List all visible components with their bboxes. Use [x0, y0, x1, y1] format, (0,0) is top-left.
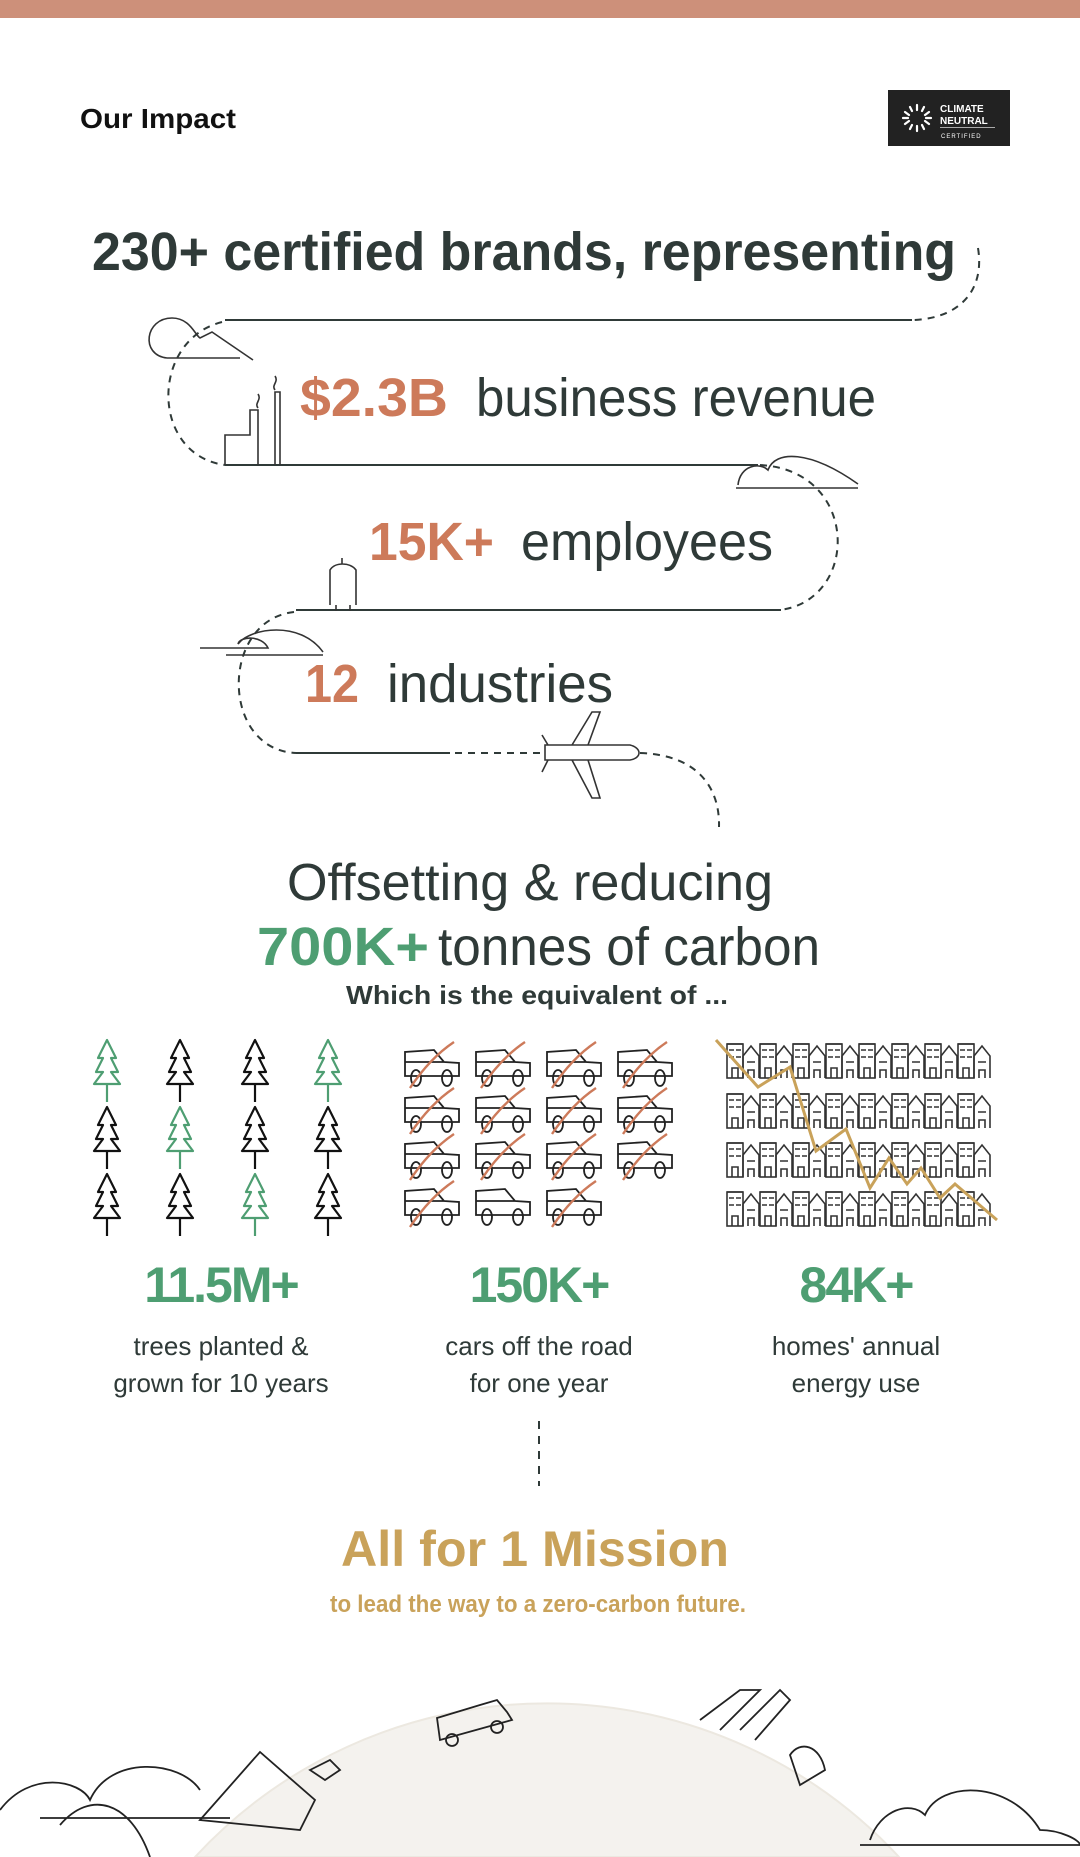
stat: homes: homes' annual	[772, 1331, 940, 1361]
stat: employees: 15K+	[369, 512, 494, 572]
globe	[0, 1690, 1080, 1857]
icon: cloud left	[200, 630, 323, 655]
stat: trees: grown for 10 years	[113, 1368, 329, 1398]
stat: industries: industries	[387, 654, 613, 714]
stat: employees: employees	[521, 512, 773, 572]
icon: cloud right	[736, 456, 858, 488]
stat: trees	[113, 1257, 329, 1398]
heading: offsetting: Offsetting & reducing	[287, 854, 773, 912]
header: Our Impact: Our Impact	[80, 103, 236, 134]
stat: revenue: $2.3B	[300, 368, 448, 428]
path lines	[168, 248, 979, 827]
subheading: Which is the equivalent of ...	[346, 980, 728, 1010]
stat: cars: cars off the road	[445, 1331, 633, 1361]
stat: cars: for one year	[470, 1368, 609, 1398]
icon: mountain cloud	[149, 318, 253, 360]
icon: airplane	[542, 712, 639, 798]
stat: cars: 150K+	[470, 1257, 609, 1313]
mission heading: All for 1 Mission	[341, 1521, 729, 1577]
mission subtitle: to lead the way to a zero-carbon future.	[330, 1591, 746, 1618]
icon grid: homes with declining line	[716, 1040, 997, 1226]
icon: car on globe	[437, 1700, 512, 1746]
stat: homes: 84K+	[800, 1257, 913, 1313]
stat: revenue	[300, 368, 876, 428]
heading: 700K+ tonnes: 700K+	[257, 917, 429, 977]
heading: 700K+ tonnes	[257, 917, 820, 977]
headline: 230+ certified brands: 230+ certified brands, representing	[92, 222, 956, 282]
stat: homes: energy use	[792, 1368, 920, 1398]
stat: cars	[445, 1257, 633, 1398]
badge: climate neutral certified: CERTIFIED	[941, 134, 982, 140]
badge: climate neutral certified	[888, 90, 1010, 146]
icon: left hills	[0, 1752, 340, 1857]
badge: climate neutral certified: NEUTRAL	[940, 116, 988, 127]
stat: homes	[772, 1257, 940, 1398]
icon: person	[330, 558, 356, 611]
icon grid: trees	[94, 1040, 341, 1236]
icon: factory	[225, 376, 280, 465]
heading: 700K+ tonnes: tonnes of carbon	[438, 917, 820, 977]
top bar	[0, 0, 1080, 18]
stat: industries: 12	[305, 654, 359, 714]
icon grid: cars	[405, 1042, 672, 1227]
stat: revenue: business revenue	[476, 368, 876, 428]
dashed connector	[538, 1421, 540, 1486]
badge: climate neutral certified: CLIMATE	[940, 104, 984, 115]
stat: trees: trees planted &	[134, 1331, 308, 1361]
stat: employees	[369, 512, 773, 572]
stat: trees: 11.5M+	[144, 1257, 299, 1313]
icon: right hills	[700, 1690, 1080, 1845]
